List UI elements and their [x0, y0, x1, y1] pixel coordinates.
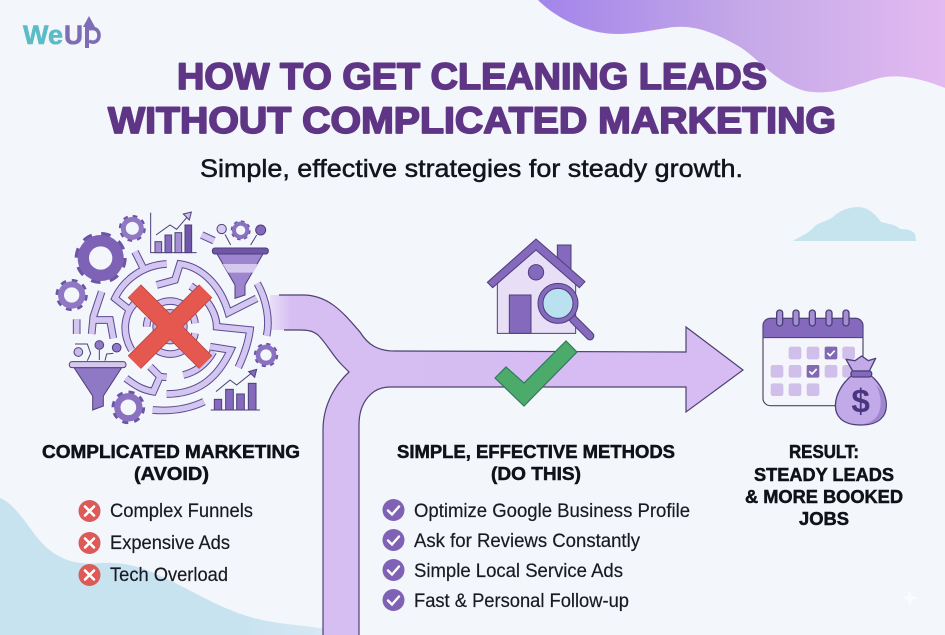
item: expensive ads: Expensive Ads: [110, 533, 230, 554]
logo: WeUp: U: [64, 20, 83, 50]
heading: complicated marketing: COMPLICATED MARKETING: [42, 442, 300, 462]
wave: top right: [538, 0, 945, 92]
heading: simple effective methods: [397, 442, 675, 484]
heading: complicated marketing: [42, 442, 300, 484]
cloud: [793, 207, 916, 241]
money bag: $: [851, 384, 870, 421]
bar chart: top: [151, 212, 197, 253]
heading: result: JOBS: [799, 509, 849, 529]
funnel: bottom: [69, 341, 126, 410]
title: [108, 56, 836, 141]
list: avoid: [78, 500, 253, 586]
logo: WeUp: [23, 16, 99, 50]
calendar: [763, 310, 863, 406]
heading: result: STEADY LEADS: [754, 465, 894, 485]
title: WITHOUT COMPLICATED MARKETING: [108, 100, 836, 141]
maze lines: [77, 235, 268, 410]
bar chart: bottom: [211, 369, 260, 410]
heading: result: RESULT:: [789, 442, 859, 462]
item: complex funnels: Complex Funnels: [110, 501, 253, 522]
item: tech overload: Tech Overload: [110, 565, 228, 586]
heading: simple effective methods: SIMPLE, EFFECTIVE METHODS: [397, 442, 675, 462]
logo: WeUp: We: [23, 20, 63, 50]
heading: result: [745, 442, 903, 529]
heading: result: & MORE BOOKED: [745, 487, 903, 507]
branching arrow: [270, 295, 743, 635]
icon: calendar with money bag: [763, 310, 886, 425]
list: do this: [382, 499, 690, 612]
title: HOW TO GET CLEANING LEADS: [177, 56, 767, 97]
item: follow-up: Fast & Personal Follow-up: [414, 591, 629, 612]
heading: complicated marketing: (AVOID): [134, 464, 209, 484]
icon: house with magnifier: [487, 239, 590, 336]
gears: [58, 217, 276, 422]
item: google business profile: Optimize Google Business Profile: [414, 501, 690, 522]
heading: simple effective methods: (DO THIS): [491, 464, 581, 484]
icon: complicated marketing maze: [58, 212, 276, 422]
item: reviews: Ask for Reviews Constantly: [414, 531, 640, 552]
subtitle: Simple, effective strategies for steady growth.: [200, 155, 743, 183]
icon: green check mark: [495, 341, 577, 406]
red cross: [134, 291, 206, 362]
sparkle: [902, 590, 918, 606]
item: local service ads: Simple Local Service Ads: [414, 561, 623, 582]
wave: bottom left: [0, 498, 325, 635]
funnel: top: [212, 224, 268, 298]
